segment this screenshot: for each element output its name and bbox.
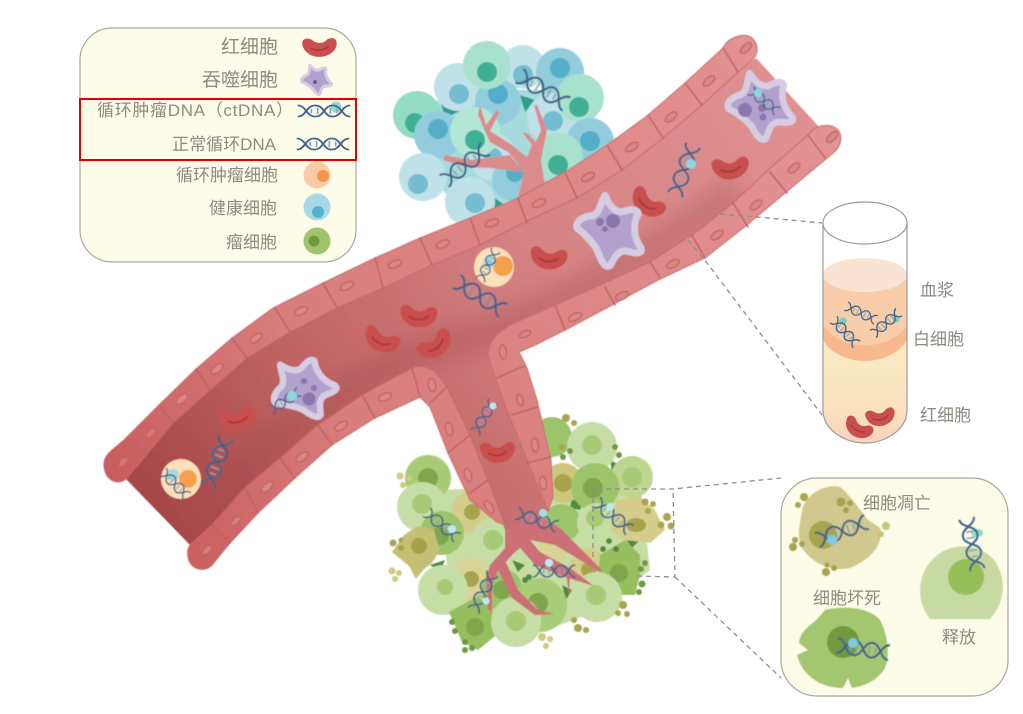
label: release: 释放 [942, 628, 976, 647]
necrotic cell [797, 608, 890, 688]
red blood cells in vessel [218, 156, 750, 463]
legend: circulating tumour cell: 循环肿瘤细胞 [176, 166, 278, 185]
macrophage right [725, 72, 797, 142]
legend: red blood cell: 红细胞 [221, 36, 278, 58]
wall cell nuclei [117, 41, 839, 556]
legend: red blood cell [221, 36, 337, 58]
legend: tumour cell: 瘤细胞 [226, 233, 277, 252]
label: red blood cells: 红细胞 [920, 406, 971, 425]
tumour capillary roots [486, 513, 602, 615]
red highlight box [80, 99, 356, 160]
legend: healthy cell [209, 194, 330, 220]
test tube [823, 202, 907, 443]
right lower wall and right branch [488, 125, 841, 511]
label: plasma: 血浆 [920, 281, 954, 300]
tumour cell cluster [392, 417, 665, 650]
legend: normal circulating DNA: 正常循环DNA [172, 135, 277, 154]
healthy cell cluster [393, 41, 614, 227]
label: white blood cells: 白细胞 [913, 330, 964, 349]
tube liquid layers [823, 258, 907, 443]
cell death panel [781, 478, 1008, 696]
apoptotic cell [789, 486, 890, 576]
lower vessel wall and left branch [188, 366, 505, 569]
circulating tumour cell centre [474, 247, 514, 287]
legend: ctDNA: 循环肿瘤DNA（ctDNA） [97, 101, 293, 120]
apoptotic bodies around tumour [388, 414, 674, 653]
tube rim [823, 202, 907, 244]
lumen shading [210, 190, 740, 505]
legend: healthy cell: 健康细胞 [209, 199, 277, 218]
tube DNA fragments [830, 302, 902, 348]
illustration artwork [104, 35, 841, 653]
tree-like capillary in healthy cells [443, 105, 547, 198]
legend panel [80, 28, 356, 262]
label: apoptosis: 细胞凋亡 [863, 494, 931, 513]
blood vessel lumen [125, 58, 820, 545]
macrophage left [263, 349, 344, 429]
legend: tumour cell [226, 228, 330, 254]
dashed leader lines [593, 212, 822, 678]
legend: circulating tumour cell [176, 162, 330, 188]
circulating tumour cell left [159, 459, 201, 500]
legend: normal circulating DNA [172, 135, 349, 154]
tube outline [823, 223, 907, 443]
tube red blood cells [841, 407, 896, 443]
legend: macrophage [202, 65, 331, 95]
label: necrosis: 细胞坏死 [813, 589, 881, 608]
macrophage centre [568, 190, 653, 274]
legend: macrophage: 吞噬细胞 [202, 69, 278, 91]
upper vessel wall [104, 35, 757, 482]
ctDNA fragments in vessel and tissue [201, 69, 700, 613]
DNA release cell [920, 517, 1003, 619]
